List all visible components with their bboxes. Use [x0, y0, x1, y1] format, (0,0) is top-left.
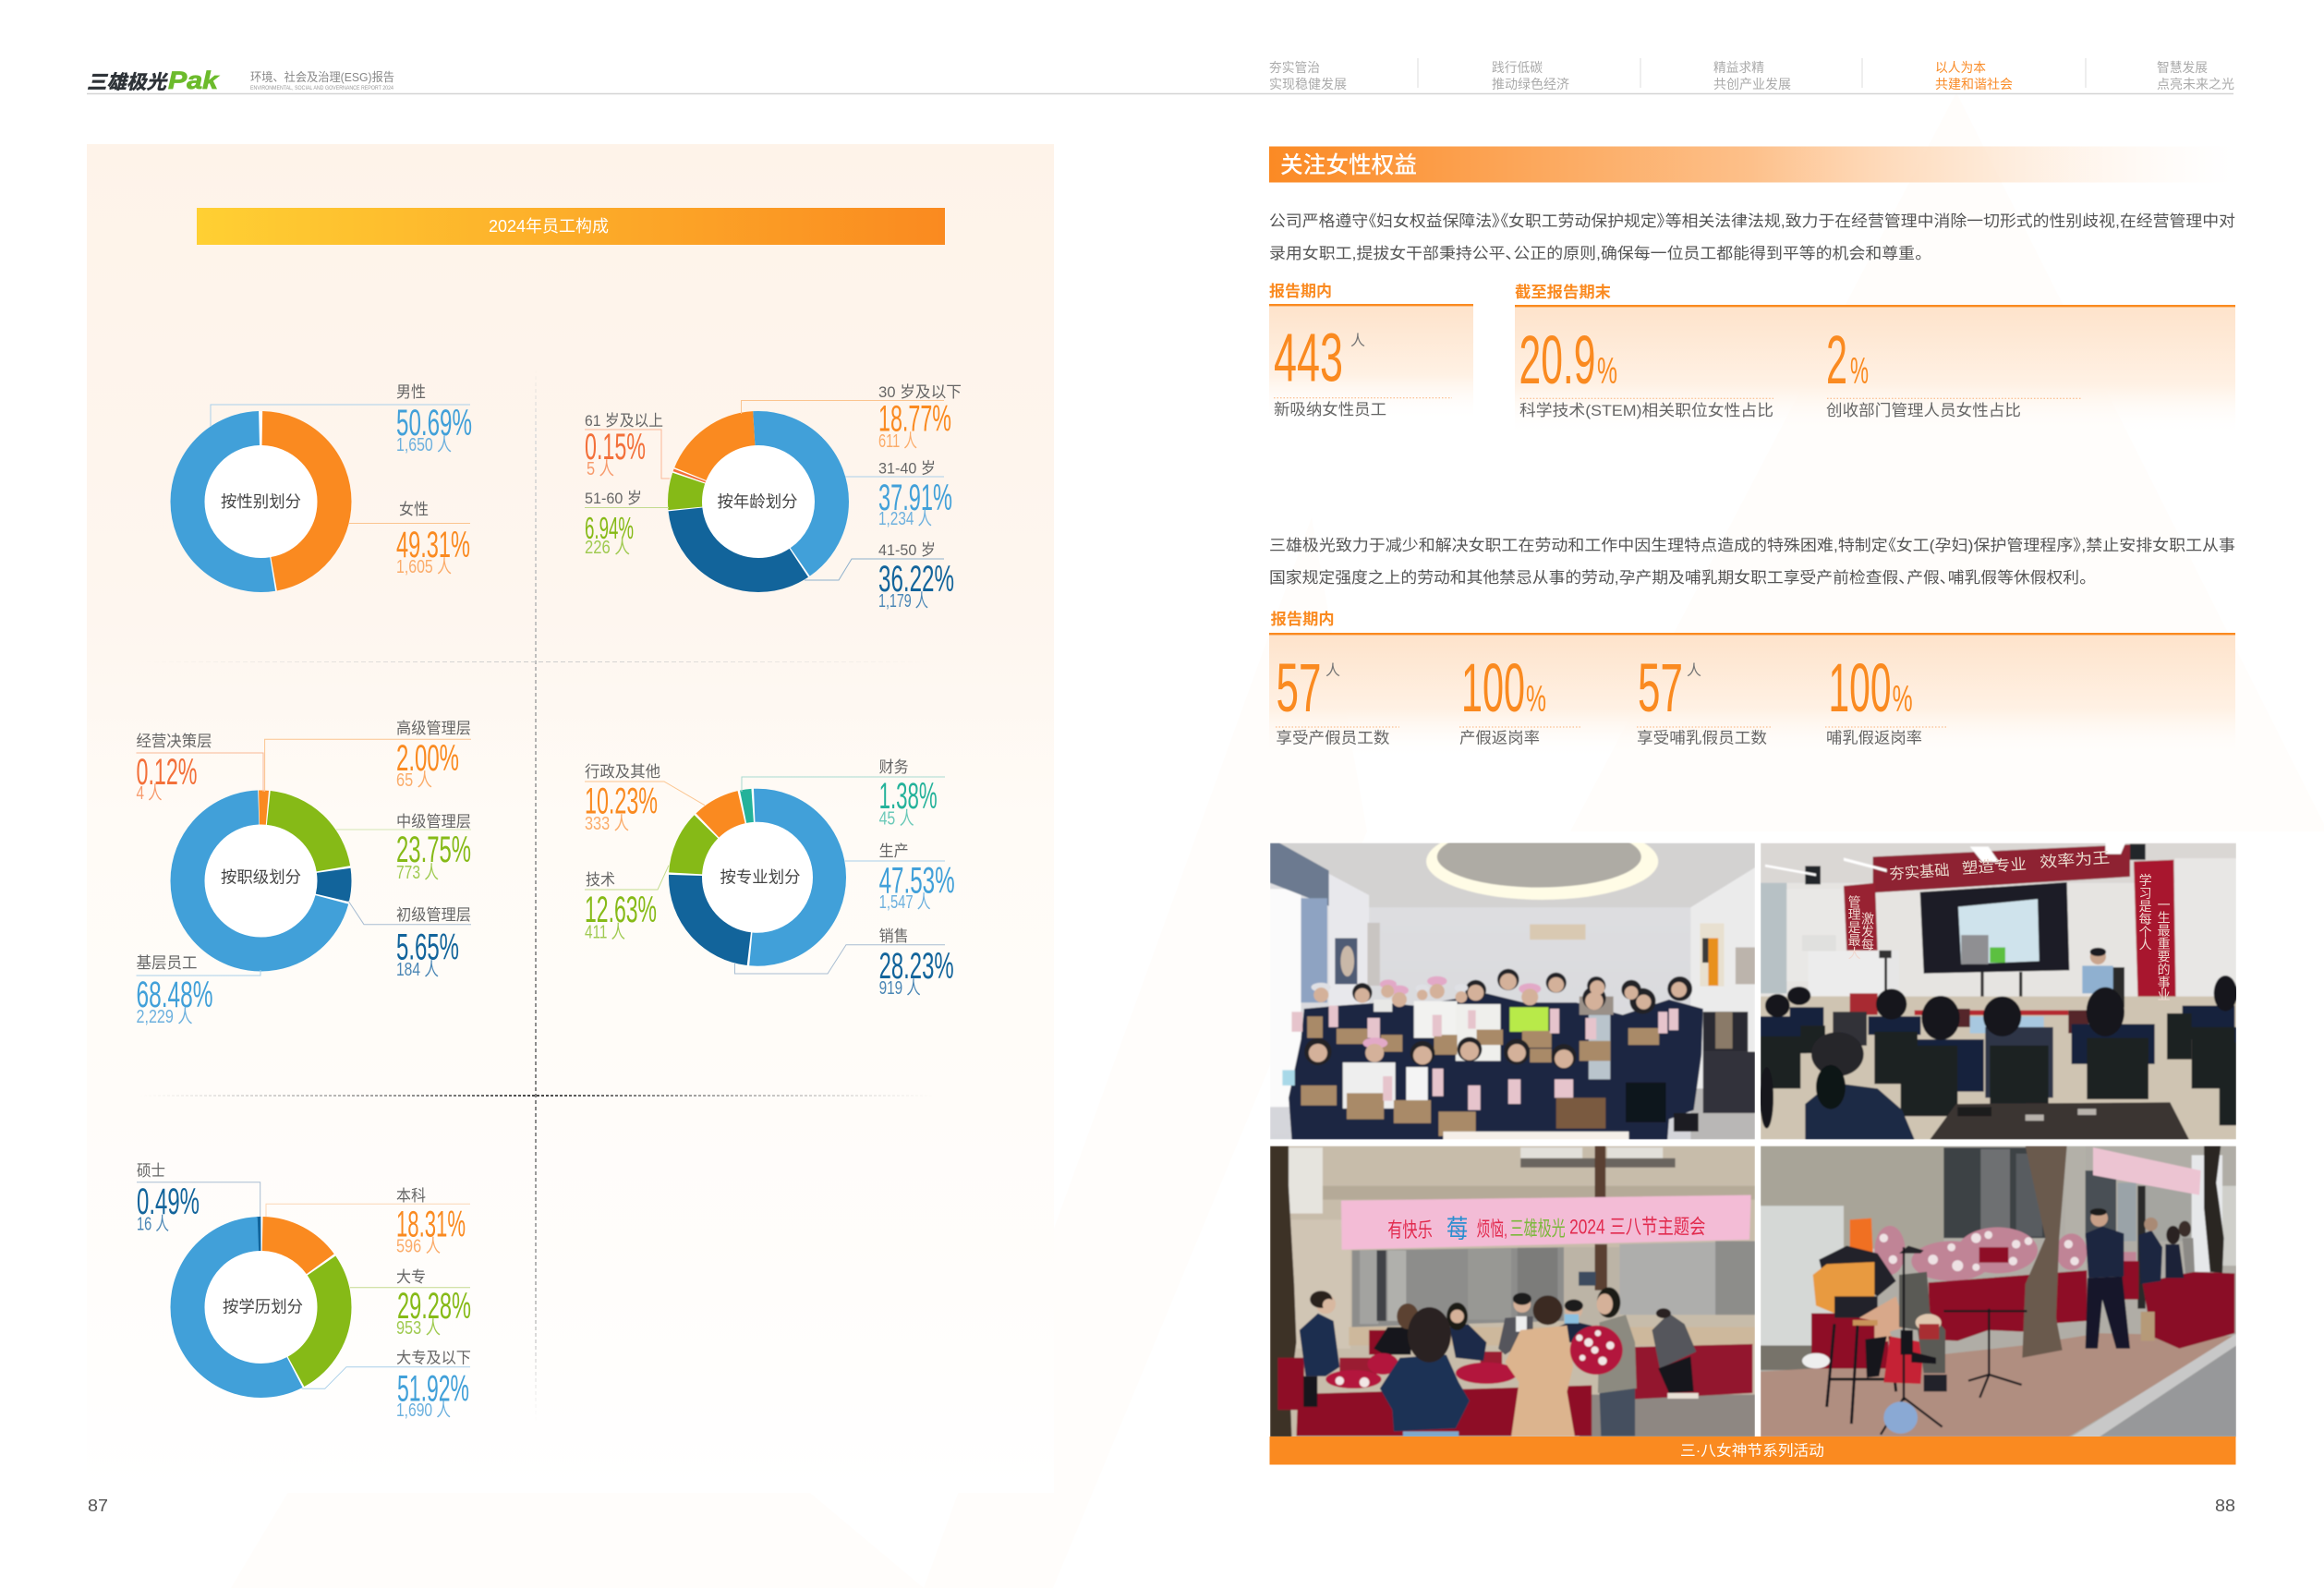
label: production	[845, 842, 955, 913]
label: junior management: 184 人	[396, 959, 439, 980]
stat: revenue department managers: 2	[1826, 321, 1847, 398]
paragraph one	[1269, 212, 2235, 262]
label: middle management: 773 人	[396, 862, 439, 883]
label: 61 and over: 61 岁及以上	[585, 412, 663, 430]
label: executive: 0.12%	[137, 752, 198, 793]
label: 61 and over	[585, 412, 670, 479]
stat: maternity return rate: 产假返岗率	[1459, 730, 1540, 746]
chart: by education	[137, 1162, 471, 1421]
stat: revenue department managers: %	[1850, 351, 1869, 392]
photo vertical banner text	[1847, 874, 2172, 1001]
label: master: 0.49%	[137, 1182, 200, 1222]
panel title bar	[197, 208, 945, 245]
paragraph one: 录用女职工,提拔女干部秉持公平、公正的原则,确保每一位员工都能得到平等的机会和尊重。	[1269, 245, 1923, 262]
label: master	[137, 1162, 260, 1235]
section heading bar	[1269, 146, 2233, 183]
label: below college: 51.92%	[397, 1369, 469, 1410]
stats: maternity and nursing	[1269, 611, 2235, 759]
label: production: 1,547 人	[879, 891, 931, 913]
stat: nursing return rate: %	[1893, 679, 1913, 720]
label: below college: 1,690 人	[396, 1400, 451, 1421]
label: frontline staff: 基层员工	[137, 954, 198, 972]
paragraph two	[1269, 537, 2235, 587]
stat: maternity leave employees: 人	[1325, 662, 1340, 679]
label: production: 47.53%	[879, 861, 955, 902]
label: college: 29.28%	[397, 1286, 471, 1327]
paragraph two: 三雄极光致力于减少和解决女职工在劳动和工作中因生理特点造成的特殊困难,特制定《女工(孕妇)保护管理程序》,禁止安排女职工从事	[1269, 537, 2235, 554]
label: admin and other: 行政及其他	[585, 763, 660, 781]
label: sales: 28.23%	[879, 946, 954, 987]
stat: nursing leave employees: 享受哺乳假员工数	[1637, 730, 1767, 746]
label: executive	[137, 733, 263, 804]
label: 31-40: 1,234 人	[878, 508, 932, 529]
label: college: 大专	[396, 1268, 426, 1286]
donut center label: 按性别划分	[221, 492, 301, 511]
stat: revenue department managers	[1826, 321, 2081, 419]
navigation: 智慧发展	[2157, 60, 2208, 75]
label: 41-50: 1,179 人	[878, 590, 928, 612]
report title: 环境、社会及治理(ESG)报告	[250, 70, 394, 84]
navigation: 共建和谐社会	[1935, 77, 2013, 91]
label: middle management: 中级管理层	[396, 813, 471, 830]
navigation: 共创产业发展	[1713, 77, 1791, 91]
stat: maternity leave employees: 57	[1277, 649, 1321, 726]
donut center label: 按职级划分	[221, 868, 301, 887]
page number right: 88	[2215, 1497, 2235, 1515]
photo: rose booth event	[1270, 1146, 1755, 1436]
label: female: 女性	[399, 501, 429, 518]
photo vertical banner text: 一生最重要的事业	[2157, 898, 2172, 1001]
label: admin and other	[585, 763, 705, 834]
donut: profession	[669, 789, 846, 966]
donut center label: 按年龄划分	[717, 492, 798, 511]
label: 31-40	[845, 460, 952, 529]
label: 41-50: 41-50 岁	[878, 541, 936, 559]
photo caption bar: 三·八女神节系列活动	[1680, 1441, 1824, 1460]
label: 30 and under: 611 人	[878, 430, 917, 452]
navigation: 推动绿色经济	[1492, 77, 1569, 91]
paragraph one: 公司严格遵守《妇女权益保障法》《女职工劳动保护规定》等相关法律法规,致力于在经营管理中消除一切形式的性别歧视,在经营管理中对	[1269, 212, 2235, 230]
label: male: 男性	[396, 383, 426, 401]
photo banner text: 2024 三八节主题会	[1569, 1216, 1705, 1239]
label: college: 953 人	[396, 1317, 441, 1339]
label: 51-60: 6.94%	[585, 511, 634, 545]
label: 51-60: 226 人	[585, 537, 630, 558]
navigation: 精益求精	[1713, 60, 1764, 75]
photo banner text: 夯实基础	[1889, 861, 1950, 883]
navigation: 实现稳健发展	[1269, 77, 1347, 91]
logo	[87, 67, 220, 94]
panel: employee composition	[87, 144, 1054, 1493]
label: master: 硕士	[137, 1162, 165, 1180]
label: 31-40: 31-40 岁	[878, 460, 936, 477]
stat: nursing return rate: 100	[1829, 649, 1892, 726]
label: male: 1,650 人	[396, 434, 452, 455]
label: below college	[302, 1349, 471, 1421]
photo banner text: 三雄极光	[1509, 1218, 1566, 1241]
label: 61 and over: 5 人	[587, 458, 614, 479]
stat: new female employees: 新吸纳女性员工	[1274, 401, 1386, 418]
label: admin and other: 333 人	[585, 813, 629, 834]
donut: education	[170, 1217, 351, 1398]
photo: group with gift boxes	[1270, 842, 1755, 1140]
label: 31-40: 37.91%	[878, 478, 952, 518]
label: bachelor	[266, 1187, 470, 1257]
photo caption bar	[1269, 1436, 2235, 1465]
stat: nursing leave employees: 57	[1638, 649, 1683, 726]
label: finance	[742, 758, 945, 830]
photo banner text: 塑造专业	[1961, 855, 2027, 878]
photo vertical banner text: 学习是每个人	[2138, 874, 2153, 951]
photo banner text	[1889, 849, 2111, 883]
report title	[250, 70, 394, 91]
stats: maternity and nursing: 报告期内	[1271, 611, 1335, 628]
label: male	[211, 383, 472, 455]
stats: end of reporting period: 截至报告期末	[1515, 284, 1611, 301]
chart: by profession	[585, 758, 955, 999]
label: 61 and over: 0.15%	[585, 427, 646, 467]
label: technology: 技术	[586, 871, 615, 889]
navigation: 践行低碳	[1492, 60, 1543, 75]
label: sales	[735, 927, 954, 999]
report title: ENVIRONMENTAL, SOCIAL AND GOVERNANCE REPORT 2024	[250, 86, 394, 91]
label: male: 50.69%	[396, 403, 472, 443]
label: 30 and under	[741, 383, 962, 452]
stat: maternity leave employees	[1276, 649, 1399, 746]
stat: new female employees: 443	[1274, 320, 1343, 396]
stats: during reporting period: 报告期内	[1269, 283, 1332, 300]
donut: job level	[170, 791, 351, 972]
label: technology	[585, 866, 669, 943]
stat: maternity return rate: %	[1526, 679, 1546, 720]
stats: end of reporting period	[1515, 284, 2235, 436]
label: middle management	[336, 813, 471, 883]
photo banner text: 有快乐	[1387, 1218, 1433, 1242]
photo: guitarist performance	[1761, 1146, 2236, 1437]
navigation: 以人为本	[1935, 60, 1986, 75]
label: frontline staff: 2,229 人	[137, 1006, 192, 1027]
stats: during reporting period	[1269, 283, 1473, 421]
stat: maternity leave employees: 享受产假员工数	[1276, 730, 1389, 746]
section heading bar: 关注女性权益	[1280, 152, 1417, 178]
stat: maternity return rate: 100	[1461, 649, 1525, 726]
label: female: 1,605 人	[396, 556, 452, 577]
label: sales: 销售	[879, 927, 909, 945]
label: technology: 12.63%	[585, 890, 657, 930]
donut center label: 按学历划分	[223, 1297, 303, 1315]
stat: nursing return rate: 哺乳假返岗率	[1826, 730, 1922, 746]
label: college	[350, 1268, 471, 1339]
label: below college: 大专及以下	[396, 1349, 471, 1367]
label: 41-50: 36.22%	[878, 559, 954, 600]
label: finance: 45 人	[879, 808, 914, 830]
photo banner text	[1387, 1215, 1705, 1243]
label: bachelor: 18.31%	[396, 1204, 466, 1244]
label: junior management	[348, 901, 471, 980]
photo banner text: 烦恼,	[1477, 1218, 1507, 1241]
chart: by job level	[137, 720, 471, 1027]
label: admin and other: 10.23%	[585, 782, 658, 822]
label: technology: 411 人	[585, 922, 625, 943]
label: 51-60: 51-60 岁	[585, 490, 642, 507]
label: female	[349, 501, 470, 577]
donut: age	[668, 411, 849, 592]
stat: STEM share: %	[1597, 351, 1617, 392]
photo banner text: 效率为王	[2040, 849, 2111, 871]
label: 30 and under: 18.77%	[878, 399, 951, 440]
stat: new female employees: 人	[1350, 333, 1365, 349]
stat: STEM share: 科学技术(STEM)相关职位女性占比	[1519, 402, 1773, 419]
stat: STEM share	[1519, 321, 1773, 419]
donut center label: 按专业划分	[720, 868, 800, 887]
navigation: 夯实管治	[1269, 60, 1320, 75]
donut: gender	[170, 411, 351, 592]
label: frontline staff: 68.48%	[137, 975, 212, 1015]
label: bachelor: 本科	[396, 1187, 426, 1205]
label: executive: 经营决策层	[137, 733, 212, 750]
label: female: 49.31%	[396, 525, 470, 565]
label: bachelor: 596 人	[396, 1236, 441, 1257]
label: senior management: 2.00%	[396, 738, 459, 779]
photo vertical banner text: 管理是最大	[1847, 895, 1862, 960]
navigation: 点亮未来之光	[2157, 77, 2234, 91]
photo vertical banner text: 激发每	[1860, 912, 1875, 951]
page number left: 87	[88, 1497, 108, 1515]
label: finance: 1.38%	[879, 776, 938, 817]
paragraph two: 国家规定强度之上的劳动和其他禁忌从事的劳动,孕产期及哺乳期女职工享受产前检查假、产假、哺乳假等休假权利。	[1269, 569, 2088, 587]
label: sales: 919 人	[879, 977, 921, 999]
panel title bar: 2024年员工构成	[489, 217, 609, 236]
stat: nursing leave employees	[1637, 649, 1771, 746]
stat: revenue department managers: 创收部门管理人员女性占比	[1826, 402, 2021, 419]
label: production: 生产	[879, 842, 909, 860]
stat: STEM share: 20.9	[1519, 321, 1596, 398]
header	[87, 58, 2234, 94]
label: 41-50	[805, 541, 954, 612]
label: senior management	[265, 720, 471, 792]
stat: new female employees	[1274, 320, 1452, 418]
photo: training session	[1761, 842, 2236, 1140]
chart: by gender	[170, 383, 472, 592]
chart: by age	[585, 383, 962, 612]
photo banner text: 莓	[1446, 1215, 1468, 1243]
stat: nursing leave employees: 人	[1687, 662, 1701, 679]
logo: 三雄极光	[87, 72, 168, 93]
logo: Pak	[168, 67, 220, 94]
label: executive: 4 人	[137, 782, 163, 804]
label: finance: 财务	[879, 758, 909, 776]
label: master: 16 人	[137, 1214, 169, 1235]
label: junior management: 初级管理层	[396, 906, 471, 924]
label: senior management: 65 人	[396, 770, 432, 791]
label: senior management: 高级管理层	[396, 720, 471, 737]
label: frontline staff	[137, 954, 260, 1027]
label: 30 and under: 30 岁及以下	[878, 383, 962, 401]
label: middle management: 23.75%	[396, 830, 471, 870]
navigation	[1269, 58, 2234, 91]
label: 51-60	[585, 490, 669, 558]
label: junior management: 5.65%	[396, 927, 459, 968]
